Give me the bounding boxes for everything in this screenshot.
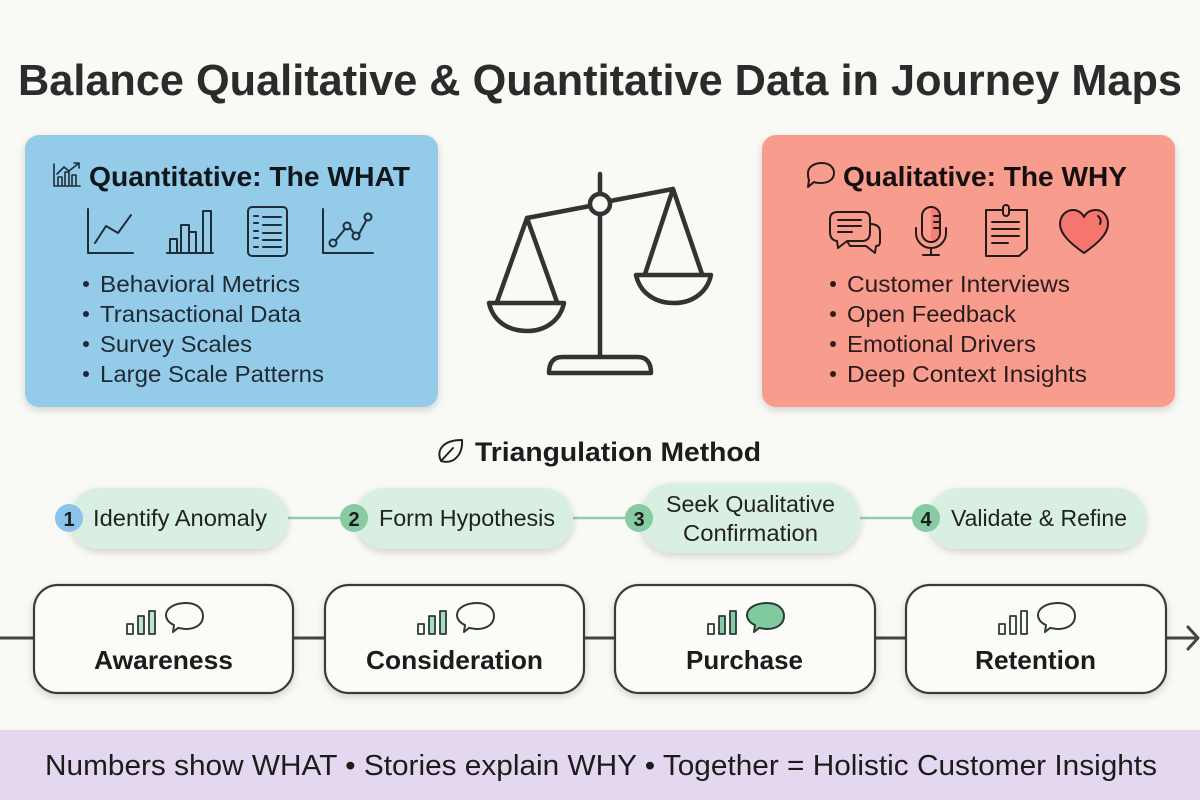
icon: microphone — [916, 207, 946, 255]
icon: leaf — [439, 440, 462, 462]
list: qualitative data types: Customer Interviews — [847, 271, 1070, 297]
heading: quantitative: Quantitative: The WHAT — [89, 161, 410, 192]
heading: triangulation method — [439, 437, 761, 467]
step 4: validate and refine — [912, 488, 1146, 549]
step 2: form hypothesis — [340, 488, 573, 549]
icon: line chart — [88, 209, 133, 253]
stage: awareness — [34, 585, 293, 693]
icon: speech bubble — [808, 163, 834, 187]
list: qualitative data types — [830, 271, 1087, 387]
footer banner: Numbers show WHAT • Stories explain WHY • Together = Holistic Customer Insights — [45, 750, 1157, 782]
icon: chat bubbles — [830, 212, 880, 253]
icon: bar chart — [167, 211, 213, 253]
list: qualitative data types: Open Feedback — [847, 301, 1016, 327]
icon: bars and bubble — [999, 603, 1075, 634]
list: quantitative data types: Survey Scales — [100, 331, 252, 357]
step 3: seek qualitative confirmation — [625, 483, 860, 553]
step 3: seek qualitative confirmation: 3 — [633, 509, 645, 531]
panel: quantitative — [25, 135, 438, 407]
icon: scatter line chart — [323, 209, 373, 253]
list: quantitative data types: Large Scale Patterns — [100, 361, 324, 387]
stage: purchase — [615, 585, 875, 693]
step 4: validate and refine: Validate & Refine — [951, 505, 1127, 531]
stage: consideration — [325, 585, 584, 693]
connector lines between steps — [288, 517, 914, 519]
heading: qualitative: Qualitative: The WHY — [843, 161, 1127, 192]
step 1: identify anomaly: Identify Anomaly — [93, 505, 268, 531]
heading text: Triangulation Method — [475, 437, 761, 467]
panel: qualitative — [762, 135, 1175, 407]
step 2: form hypothesis: Form Hypothesis — [379, 505, 555, 531]
icon: checklist document — [248, 207, 287, 256]
icon: bars and bubble — [127, 603, 203, 634]
list: qualitative data types: Deep Context Insights — [847, 361, 1087, 387]
stage: awareness: Awareness — [94, 645, 233, 675]
step 4: validate and refine: 4 — [920, 509, 932, 531]
list: quantitative data types: Transactional Data — [100, 301, 302, 327]
icon: bars and highlighted bubble — [708, 603, 784, 634]
stage: consideration: Consideration — [366, 645, 543, 675]
step 1: identify anomaly: 1 — [63, 509, 75, 531]
icon: clipboard note — [986, 205, 1027, 256]
list: quantitative data types — [83, 271, 324, 387]
step 1: identify anomaly — [55, 488, 288, 549]
list: quantitative data types: Behavioral Metrics — [100, 271, 300, 297]
step 2: form hypothesis: 2 — [348, 509, 360, 531]
stage: purchase: Purchase — [686, 645, 803, 675]
journey timeline arrow — [0, 627, 1198, 649]
stage: retention: Retention — [975, 645, 1096, 675]
stage: retention — [906, 585, 1166, 693]
step 3: seek qualitative confirmation: Seek Qualitative — [666, 491, 835, 517]
title: Balance Qualitative & Quantitative Data in Journey Maps — [18, 56, 1182, 105]
footer banner — [0, 730, 1200, 800]
icon: growth chart — [54, 163, 80, 186]
icon: balance scale — [489, 174, 711, 373]
list: qualitative data types: Emotional Drivers — [847, 331, 1036, 357]
step 3: seek qualitative confirmation: Confirmation — [683, 520, 818, 546]
icon: bars and bubble — [418, 603, 494, 634]
icon: heart — [1060, 210, 1108, 253]
